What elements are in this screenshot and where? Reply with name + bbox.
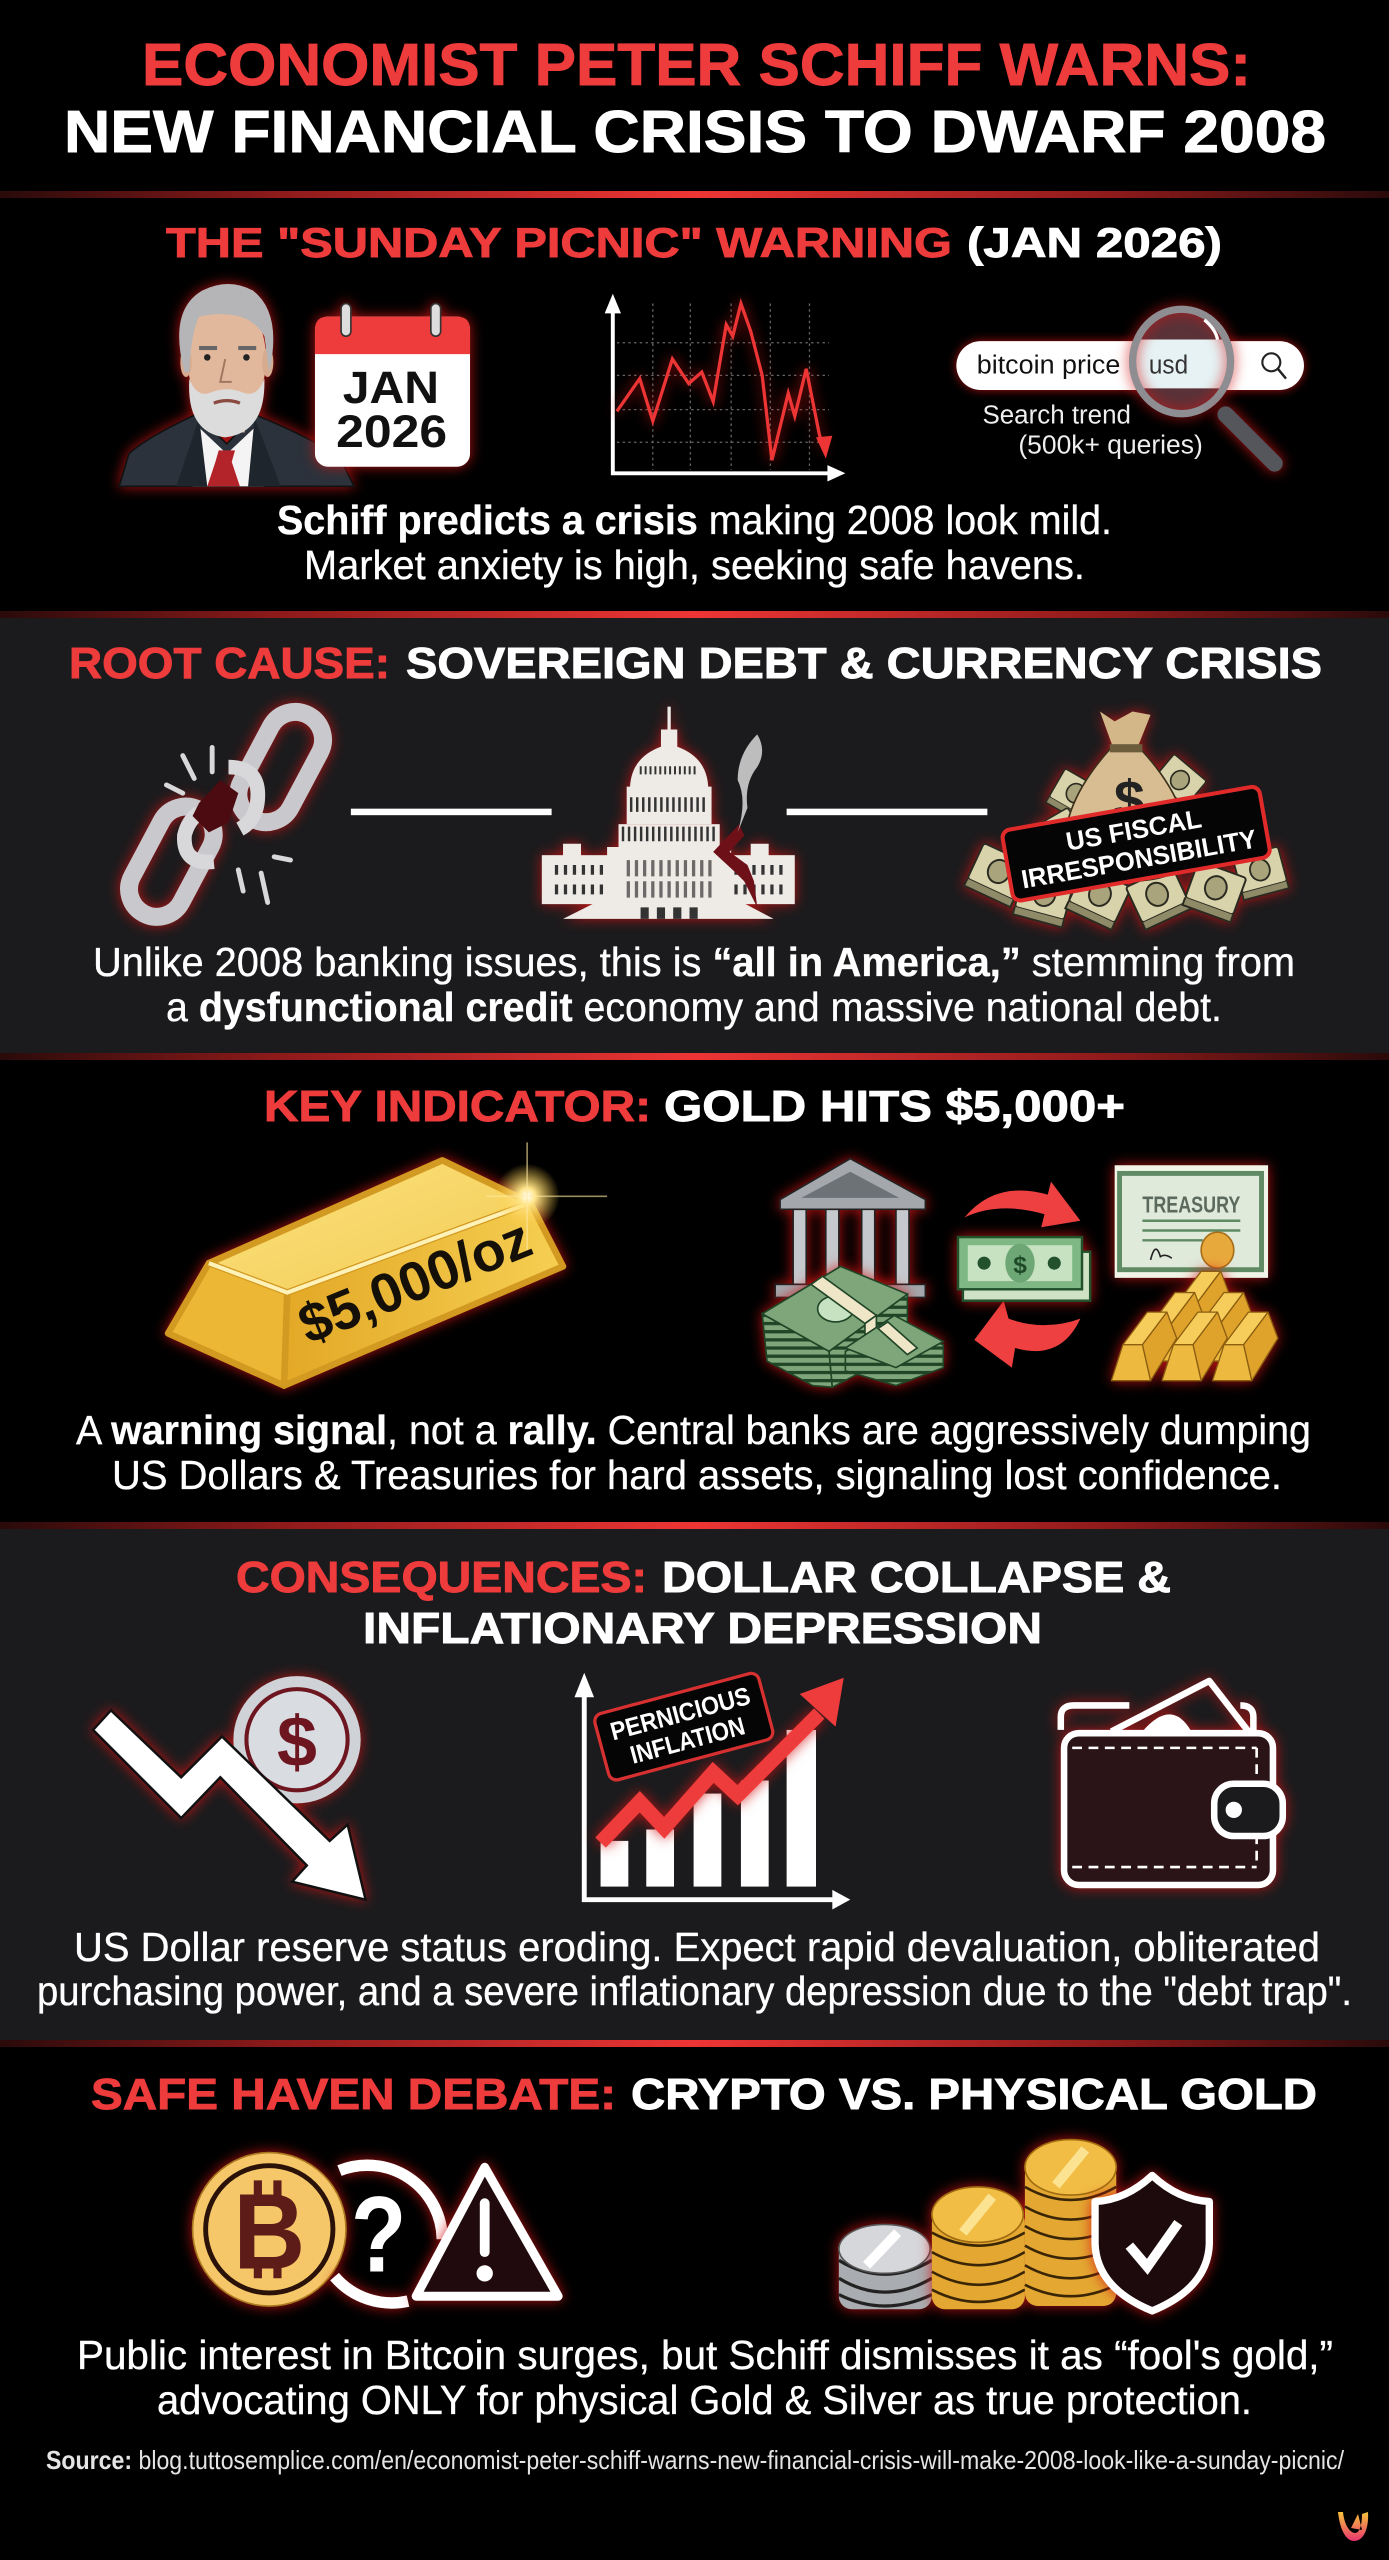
icon: bitcoin coin: B — [233, 2170, 305, 2291]
icon: treasury certificate: TREASURY — [1142, 1192, 1240, 1218]
heading: sunday picnic warning: (JAN 2026) — [967, 219, 1222, 266]
text: root cause summary — [93, 939, 1295, 1030]
icon: bitcoin price search bar: (500k+ queries) — [1018, 430, 1203, 460]
icon: money bag with US fiscal irresponsibility label: US FISCAL — [1064, 803, 1204, 857]
connector line 1 — [351, 809, 552, 815]
text: sunday picnic summary: Schiff predicts a crisis making 2008 look mild. — [277, 497, 1112, 543]
icon: January 2026 calendar: JAN — [343, 362, 439, 413]
heading: consequences: CONSEQUENCES: — [236, 1553, 647, 1602]
title: NEW FINANCIAL CRISIS TO DWARF 2008 — [64, 99, 1326, 165]
icon: January 2026 calendar: 2026 — [336, 406, 447, 457]
icon: gold bar $5,000/oz — [168, 1142, 607, 1386]
icon: bitcoin price search bar: usd — [1149, 350, 1188, 380]
connector line 2 — [787, 809, 987, 815]
text: key indicator summary: US Dollars & Treasuries for hard assets, signaling lost confidence. — [112, 1452, 1282, 1498]
chart: falling market line — [605, 294, 845, 481]
chart: pernicious inflation bars — [574, 1672, 850, 1909]
heading: root cause: ROOT CAUSE: — [69, 639, 390, 688]
heading: sunday picnic warning: THE "SUNDAY PICNIC" WARNING — [166, 219, 952, 266]
icon: falling arrow and dollar coin: $ — [277, 1702, 317, 1782]
icon: dollar bills: $ — [1013, 1252, 1027, 1279]
icon: January 2026 calendar — [315, 304, 470, 467]
text: key indicator summary — [76, 1407, 1311, 1498]
heading: key indicator: KEY INDICATOR: — [264, 1082, 651, 1131]
icon: falling arrow and dollar coin — [93, 1676, 366, 1900]
icon: protection shield with check — [1095, 2175, 1209, 2311]
heading: consequences: DOLLAR COLLAPSE & — [662, 1553, 1171, 1602]
title: ECONOMIST PETER SCHIFF WARNS: — [142, 32, 1251, 98]
icon: bitcoin price search bar: bitcoin price — [977, 350, 1120, 380]
icon: red exchange arrows — [965, 1182, 1080, 1368]
icon: dollar bills — [958, 1237, 1090, 1301]
chart: pernicious inflation bars: PERNICIOUS — [607, 1682, 753, 1746]
icon: money bag with US fiscal irresponsibility label: IRRESPONSIBILITY — [1019, 824, 1259, 894]
heading: safe haven debate: CRYPTO VS. PHYSICAL GOLD — [631, 2070, 1317, 2119]
icon: question mark circle: ? — [351, 2174, 406, 2295]
heading: root cause: SOVEREIGN DEBT & CURRENCY CRISIS — [406, 639, 1322, 688]
title — [64, 32, 1326, 165]
icon: brand logo — [1338, 2512, 1368, 2541]
text: safe haven summary: advocating ONLY for physical Gold & Silver as true protection. — [157, 2377, 1252, 2423]
icon: damaged capitol building — [542, 707, 795, 919]
heading: key indicator: GOLD HITS $5,000+ — [664, 1082, 1125, 1131]
icon: bitcoin price search bar: Search trend — [982, 400, 1131, 430]
icon: gold bars pyramid — [1111, 1271, 1278, 1381]
icon: silver coin stack — [839, 2224, 932, 2309]
text: safe haven summary — [77, 2332, 1333, 2423]
text: consequences summary — [37, 1924, 1352, 2014]
icon: bitcoin coin — [193, 2153, 346, 2306]
icon: gold bar $5,000/oz: $5,000/oz — [290, 1207, 540, 1356]
heading: safe haven debate — [91, 2070, 1317, 2119]
heading: consequences — [236, 1553, 1171, 1653]
icon: money bag with US fiscal irresponsibility label: $ — [1114, 769, 1145, 831]
text: sunday picnic summary — [277, 497, 1112, 588]
icon: warning triangle — [416, 2167, 558, 2296]
text: root cause summary: Unlike 2008 banking issues, this is “all in America,” stemming from — [93, 939, 1295, 985]
heading: consequences: INFLATIONARY DEPRESSION — [363, 1604, 1042, 1653]
icon: question mark circle — [335, 2165, 442, 2303]
icon: bitcoin price search bar — [956, 309, 1304, 463]
icon: empty wallet — [1061, 1681, 1283, 1885]
icon: broken chain — [119, 702, 333, 927]
band: consequences background — [0, 1526, 1389, 2044]
heading: sunday picnic warning — [166, 219, 1222, 266]
text: consequences summary: US Dollar reserve status eroding. Expect rapid devaluation, obliterated — [74, 1924, 1320, 1970]
chart: pernicious inflation bars: INFLATION — [627, 1712, 748, 1770]
icon: treasury certificate — [1115, 1165, 1268, 1278]
text: key indicator summary: A warning signal, not a rally. Central banks are aggressively dumping — [76, 1407, 1311, 1453]
text: sunday picnic summary: Market anxiety is high, seeking safe havens. — [304, 542, 1085, 588]
heading: safe haven debate: SAFE HAVEN DEBATE: — [91, 2070, 616, 2119]
heading: key indicator — [264, 1082, 1125, 1131]
band: root cause background — [0, 615, 1389, 1056]
text: root cause summary: a dysfunctional credit economy and massive national debt. — [166, 984, 1222, 1030]
text: safe haven summary: Public interest in Bitcoin surges, but Schiff dismisses it as “fool's gold,” — [77, 2332, 1333, 2378]
icon: money bag with US fiscal irresponsibility label — [964, 712, 1289, 930]
icon: gold coin stacks — [932, 2140, 1116, 2309]
icon: central bank with cash stacks — [762, 1159, 943, 1387]
icon: Peter Schiff portrait — [119, 284, 354, 486]
heading: root cause — [69, 639, 1322, 688]
